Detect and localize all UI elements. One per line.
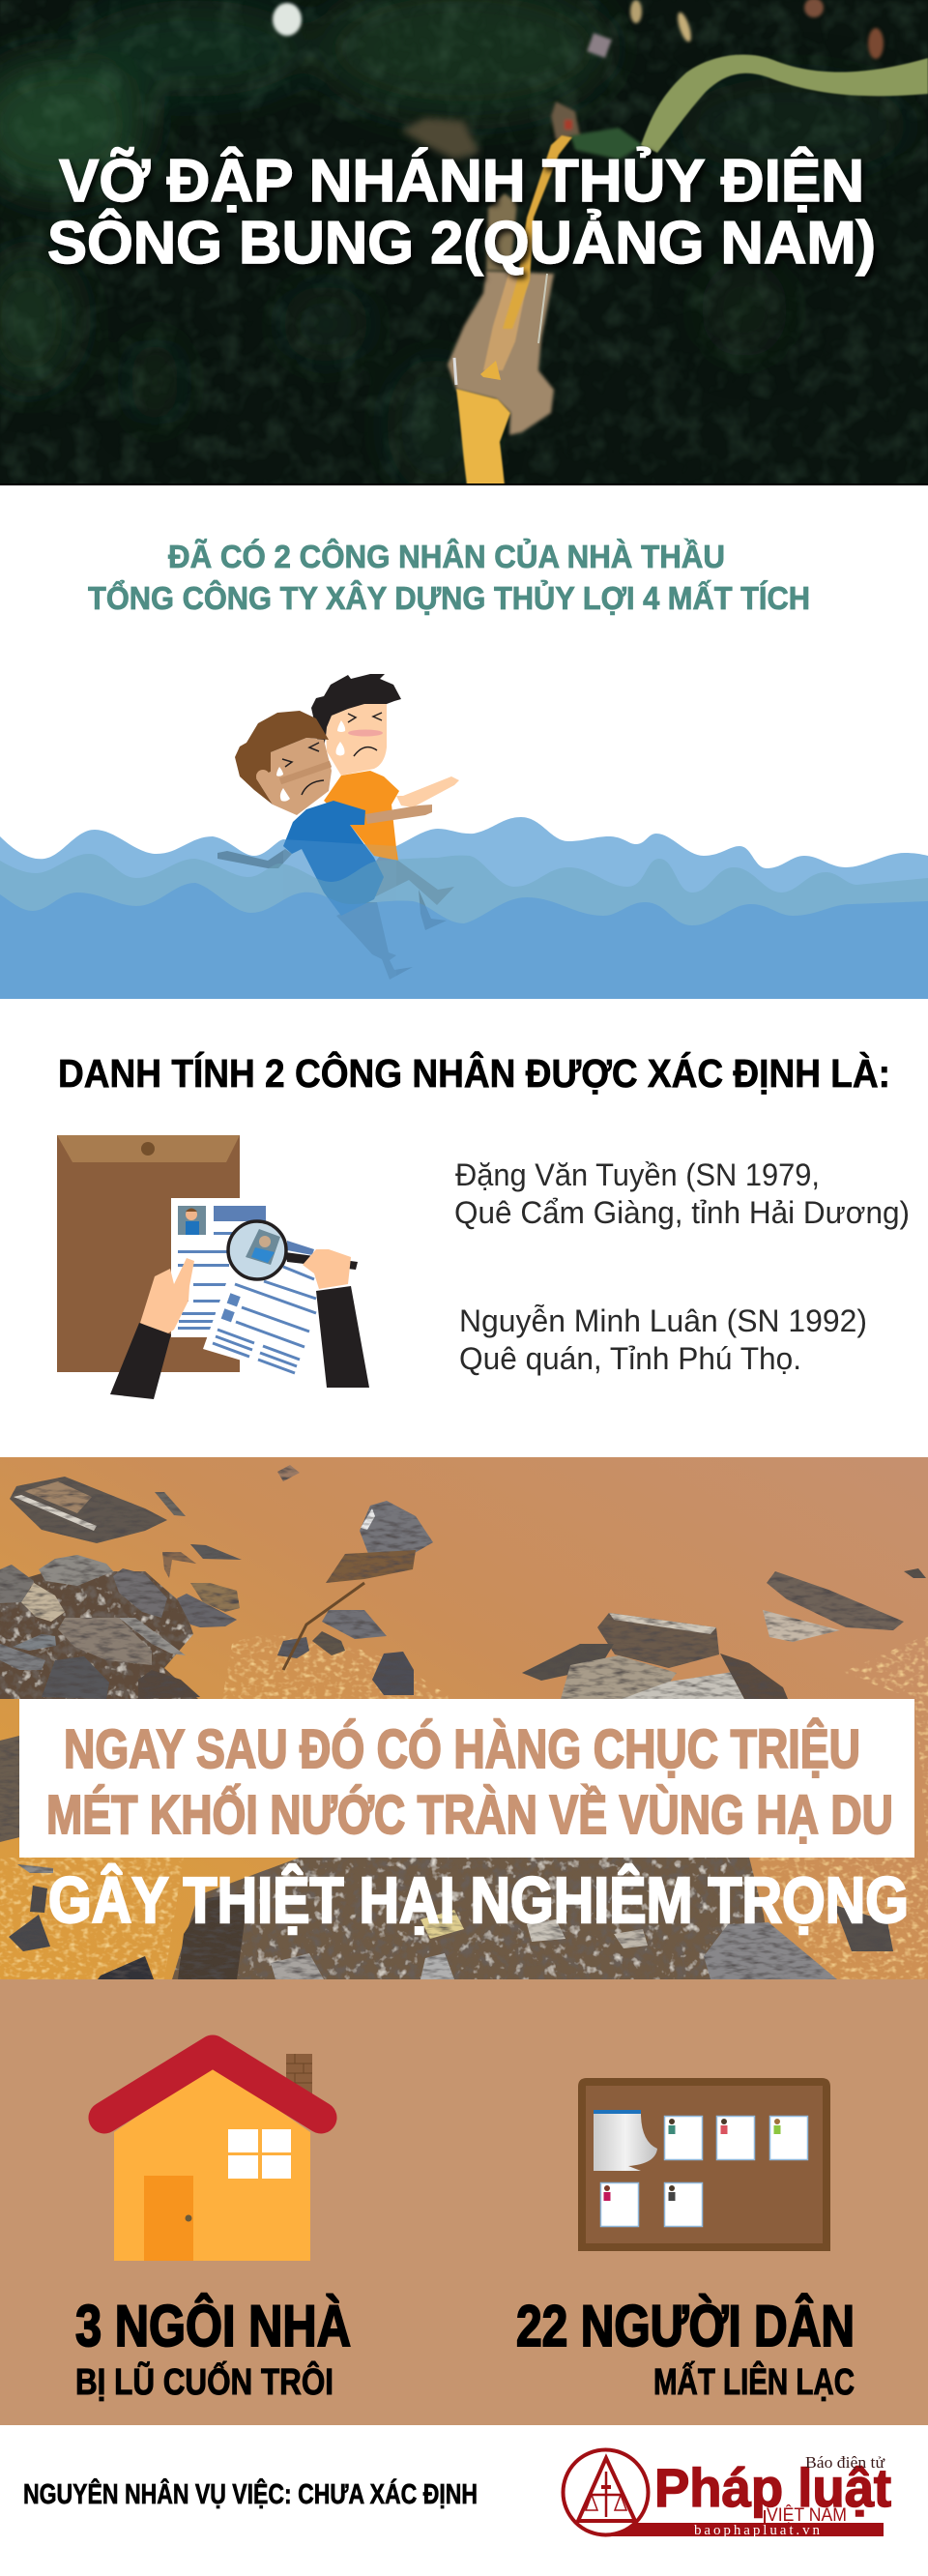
back water wave: [0, 817, 928, 999]
title: [47, 148, 876, 277]
stat: people: MẤT LIÊN LẠC: [653, 2360, 855, 2403]
footer note: NGUYÊN NHÂN VỤ VIỆC: CHƯA XÁC ĐỊNH: [23, 2477, 478, 2510]
olive river: [641, 54, 928, 153]
icon: notice board: [578, 2078, 830, 2251]
rocks lower: [172, 1858, 773, 1979]
man in blue shirt: [218, 711, 432, 980]
callout text: [46, 1717, 893, 1846]
heading: two workers missing: [88, 538, 810, 616]
rocks upper: [0, 1465, 926, 1842]
logo: Pháp luật Việt Nam: Pháp luật: [654, 2457, 891, 2518]
logo: Pháp luật Việt Nam: Báo điện tử: [805, 2453, 885, 2472]
heading: two workers missing: TỔNG CÔNG TY XÂY DỰNG THỦY LỢI 4 MẤT TÍCH: [88, 579, 810, 616]
icon: house: [104, 2051, 321, 2261]
logo: Pháp luật Việt Nam: VIỆT NAM: [767, 2504, 847, 2526]
panel: satellite photo header: [0, 0, 928, 493]
stat: houses: [75, 2294, 351, 2403]
panel: damage statistics: [0, 1979, 928, 2425]
cloud patch: [273, 3, 302, 36]
stat: houses: 3 NGÔI NHÀ: [75, 2294, 351, 2358]
yellow flood river: [503, 135, 572, 329]
illustration: two men in flood: [218, 674, 459, 980]
rock cluster behind: [0, 1571, 198, 1699]
debris flow: [448, 271, 554, 435]
text: first worker: [454, 1157, 910, 1230]
stat: houses: BỊ LŨ CUỐN TRÔI: [75, 2359, 334, 2403]
panel: missing workers: [0, 538, 928, 999]
panel: flood rocks photo: [0, 1457, 928, 1979]
stat: people: [516, 2294, 855, 2403]
title: VỠ ĐẬP NHÁNH THỦY ĐIỆN: [59, 148, 864, 215]
forest green patches: [0, 0, 909, 493]
text: second worker: Quê quán, Tỉnh Phú Thọ.: [459, 1341, 801, 1376]
logo: Pháp luật Việt Nam: [563, 2450, 891, 2538]
logo: Pháp luật Việt Nam: baophapluat.vn: [694, 2523, 820, 2538]
text: first worker: Đặng Văn Tuyền (SN 1979,: [455, 1157, 820, 1192]
settlement patches: [551, 0, 884, 160]
stat: people: 22 NGƯỜI DÂN: [516, 2294, 855, 2358]
text: second worker: Nguyễn Minh Luân (SN 1992): [459, 1303, 867, 1338]
front water wave: [0, 883, 928, 999]
text: second worker: [459, 1303, 867, 1376]
callout box: [19, 1699, 914, 1858]
man in orange shirt: [311, 674, 459, 930]
heading: two workers missing: ĐÃ CÓ 2 CÔNG NHÂN CỦA NHÀ THẦU: [168, 538, 725, 574]
panel: identities: [57, 1051, 910, 1399]
icon: envelope and documents under magnifier: [57, 1135, 369, 1399]
middle water wave: [0, 854, 928, 999]
back wave veil: [283, 839, 396, 999]
text: first worker: Quê Cẩm Giàng, tỉnh Hải Dương): [454, 1195, 910, 1230]
title: SÔNG BUNG 2(QUẢNG NAM): [47, 210, 876, 277]
foam patches: [0, 1625, 928, 1979]
